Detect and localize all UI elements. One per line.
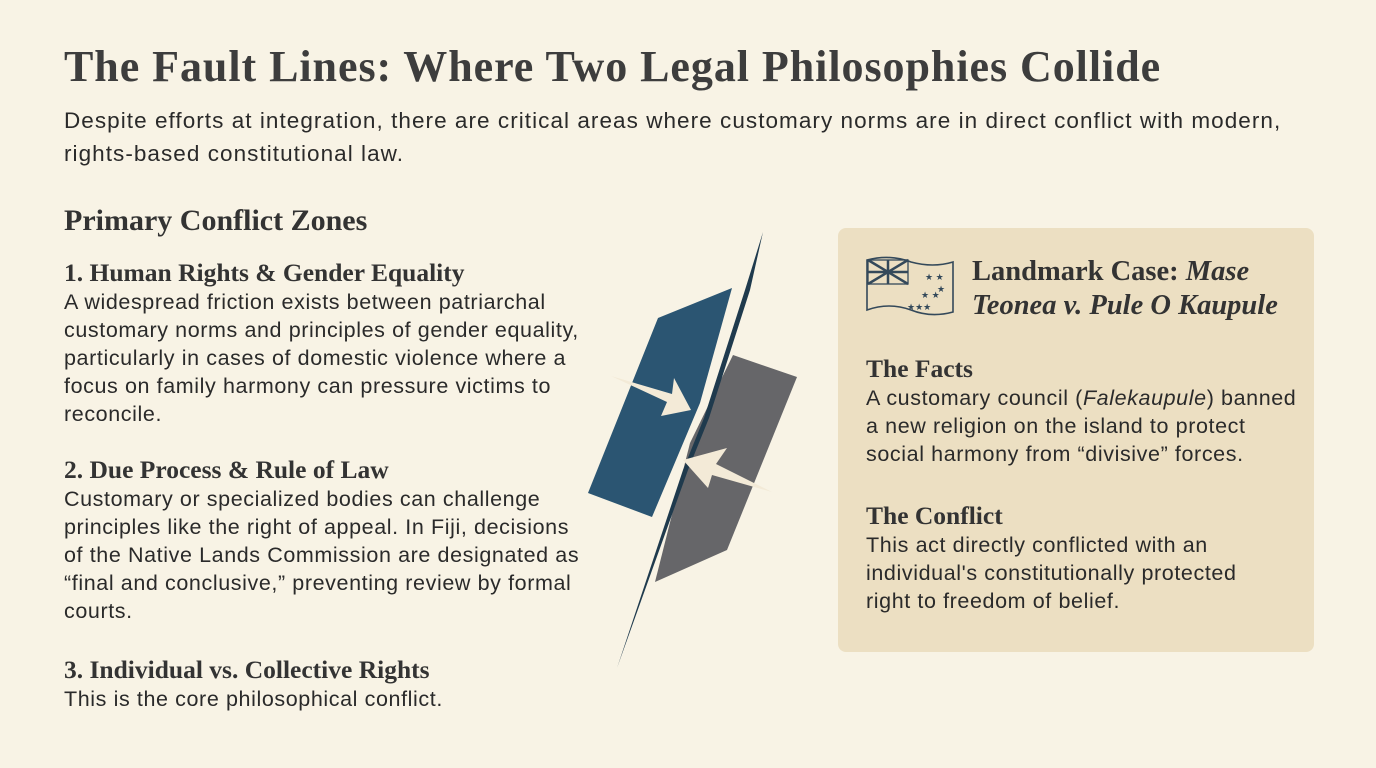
conflict zone 2: 2. Due Process & Rule of Law [64, 455, 389, 484]
subtitle [64, 108, 1281, 166]
gray plate [655, 355, 797, 582]
icon: Tuvalu flag [866, 256, 954, 316]
the facts: A customary council (Falekaupule) banned [866, 386, 1296, 410]
conflict zone 1: A widespread friction exists between patriarchal [64, 290, 546, 314]
panel heading: Teonea v. Pule O Kaupule [972, 290, 1278, 321]
the conflict: right to freedom of belief. [866, 589, 1120, 613]
conflict zone 2: of the Native Lands Commission are designated as [64, 543, 579, 567]
conflict zone 3 [64, 655, 443, 711]
the conflict [866, 501, 1237, 613]
conflict zone 1: 1. Human Rights & Gender Equality [64, 258, 465, 287]
the conflict: The Conflict [866, 501, 1003, 530]
icon: Tuvalu flag: ★ [937, 284, 945, 294]
panel: landmark case [838, 228, 1314, 652]
arrow: left-pointing [683, 448, 772, 492]
conflict zone 1: focus on family harmony can pressure victims to [64, 374, 551, 398]
panel heading [972, 256, 1278, 321]
fault line [617, 232, 763, 668]
arrow: right-pointing [611, 376, 691, 416]
title: The Fault Lines: Where Two Legal Philosophies Collide [64, 42, 1161, 91]
conflict zone 1: reconcile. [64, 402, 162, 426]
subtitle: rights-based constitutional law. [64, 141, 404, 166]
conflict zone 1: particularly in cases of domestic violence where a [64, 346, 566, 370]
conflict zone 1 [64, 258, 579, 426]
subtitle: Despite efforts at integration, there are critical areas where customary norms are in direct conflict with modern, [64, 108, 1281, 133]
conflict zone 2: courts. [64, 599, 133, 623]
the facts [866, 354, 1296, 466]
icon: Tuvalu flag: ★★★ [907, 302, 931, 312]
blue plate [588, 288, 732, 517]
the facts: The Facts [866, 354, 973, 383]
the facts: a new religion on the island to protect [866, 414, 1246, 438]
conflict zone 3: This is the core philosophical conflict. [64, 687, 443, 711]
the conflict: individual's constitutionally protected [866, 561, 1237, 585]
conflict zone 2: principles like the right of appeal. In Fiji, decisions [64, 515, 569, 539]
panel heading: Landmark Case: Mase [972, 256, 1249, 287]
conflict zone 2 [64, 455, 579, 623]
conflict zone 2: “final and conclusive,” preventing review by formal [64, 571, 571, 595]
conflict zone 2: Customary or specialized bodies can challenge [64, 487, 540, 511]
section heading: primary conflict zones: Primary Conflict Zones [64, 204, 367, 237]
icon: Tuvalu flag: ★ ★ [925, 272, 944, 282]
icon: Tuvalu flag: ★ ★ [921, 290, 940, 300]
the facts: social harmony from “divisive” forces. [866, 442, 1244, 466]
conflict zone 1: customary norms and principles of gender equality, [64, 318, 579, 342]
conflict zone 3: 3. Individual vs. Collective Rights [64, 655, 430, 684]
the conflict: This act directly conflicted with an [866, 533, 1208, 557]
